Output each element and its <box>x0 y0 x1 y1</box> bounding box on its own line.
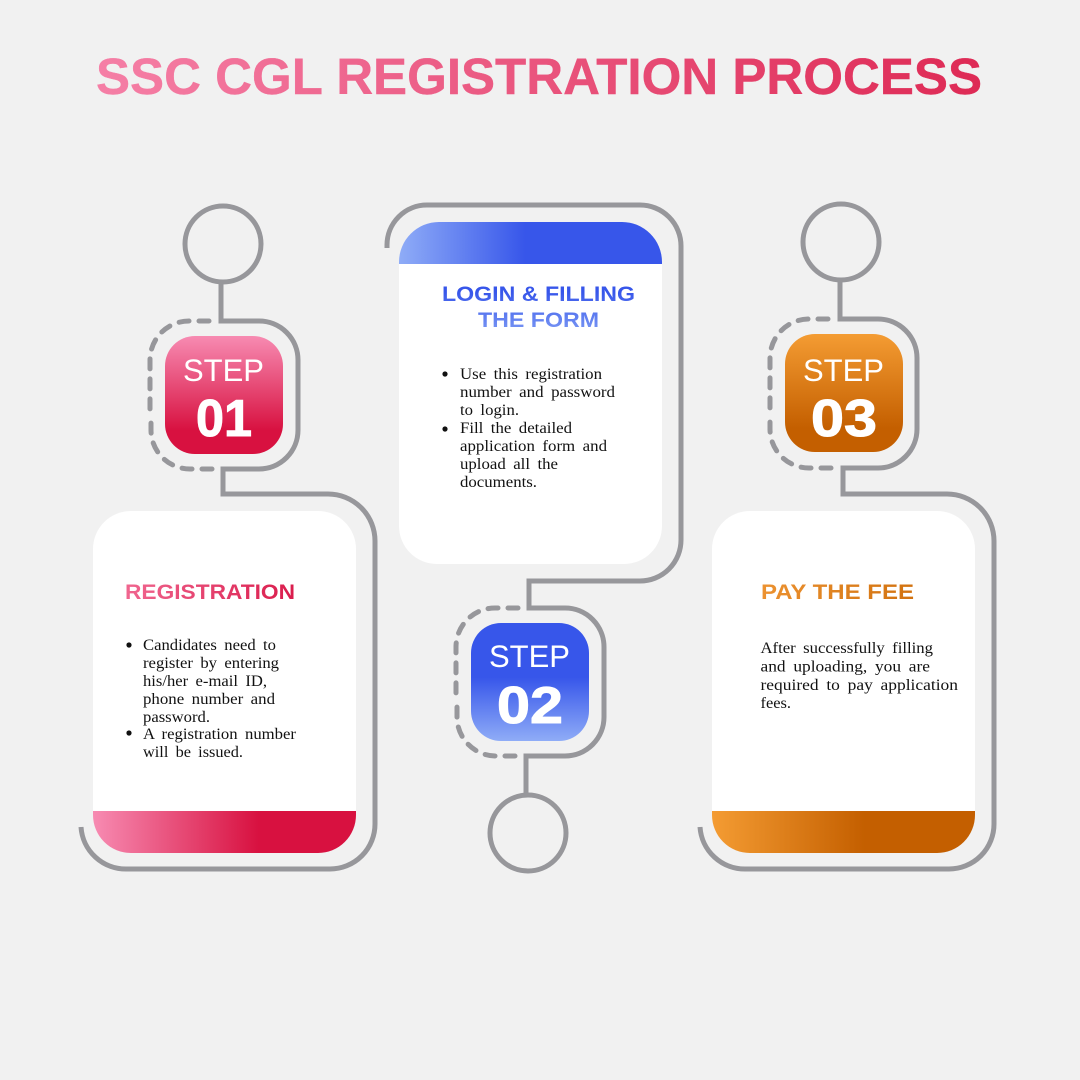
step 3 badge: 03 <box>811 390 877 448</box>
step 2 badge <box>471 623 589 741</box>
connector: step 2 <box>387 205 681 871</box>
text: registration steps: his/her e-mail ID, <box>143 673 267 690</box>
panel: fee <box>712 511 975 853</box>
step 3 badge: STEP <box>803 352 884 388</box>
step 1 badge: 01 <box>196 390 252 448</box>
text: login steps <box>442 366 615 491</box>
step 3 badge <box>785 334 903 452</box>
heading: login: LOGIN & FILLING <box>442 283 635 306</box>
panel: registration <box>93 511 356 853</box>
heading: login: THE FORM <box>478 309 599 332</box>
text: registration steps <box>126 637 297 761</box>
panel: login <box>399 222 662 564</box>
text: registration steps: phone number and <box>143 691 275 708</box>
text: login steps: application form and <box>460 438 607 455</box>
text: registration steps: register by entering <box>143 655 279 672</box>
text: registration steps: Candidates need to <box>143 637 276 654</box>
text: fee details: fees. <box>760 695 791 712</box>
text: login steps: number and password <box>460 384 615 401</box>
heading: login <box>442 283 635 332</box>
heading: registration: REGISTRATION <box>125 581 295 604</box>
text: fee details: and uploading, you are <box>760 658 930 676</box>
text: fee details: required to pay application <box>760 677 958 694</box>
connector: step 3 <box>700 204 994 869</box>
step 2 badge: 02 <box>497 677 563 735</box>
step 2 badge: STEP <box>489 638 570 674</box>
text: login steps: Fill the detailed <box>460 420 572 437</box>
text: login steps: upload all the <box>460 456 558 473</box>
text: registration steps: will be issued. <box>143 744 243 761</box>
text: fee details <box>760 640 958 712</box>
text: login steps: to login. <box>460 402 519 419</box>
step 1 badge: STEP <box>183 352 264 388</box>
text: login steps: documents. <box>460 474 537 491</box>
text: registration steps: A registration number <box>143 726 297 743</box>
heading: fee: PAY THE FEE <box>761 581 914 604</box>
text: fee details: After successfully filling <box>760 640 933 657</box>
text: login steps: Use this registration <box>460 366 602 383</box>
step 1 badge <box>165 336 283 454</box>
connector: step 1 <box>81 206 375 869</box>
title: SSC CGL REGISTRATION PROCESS <box>96 48 982 105</box>
text: registration steps: password. <box>143 709 210 726</box>
